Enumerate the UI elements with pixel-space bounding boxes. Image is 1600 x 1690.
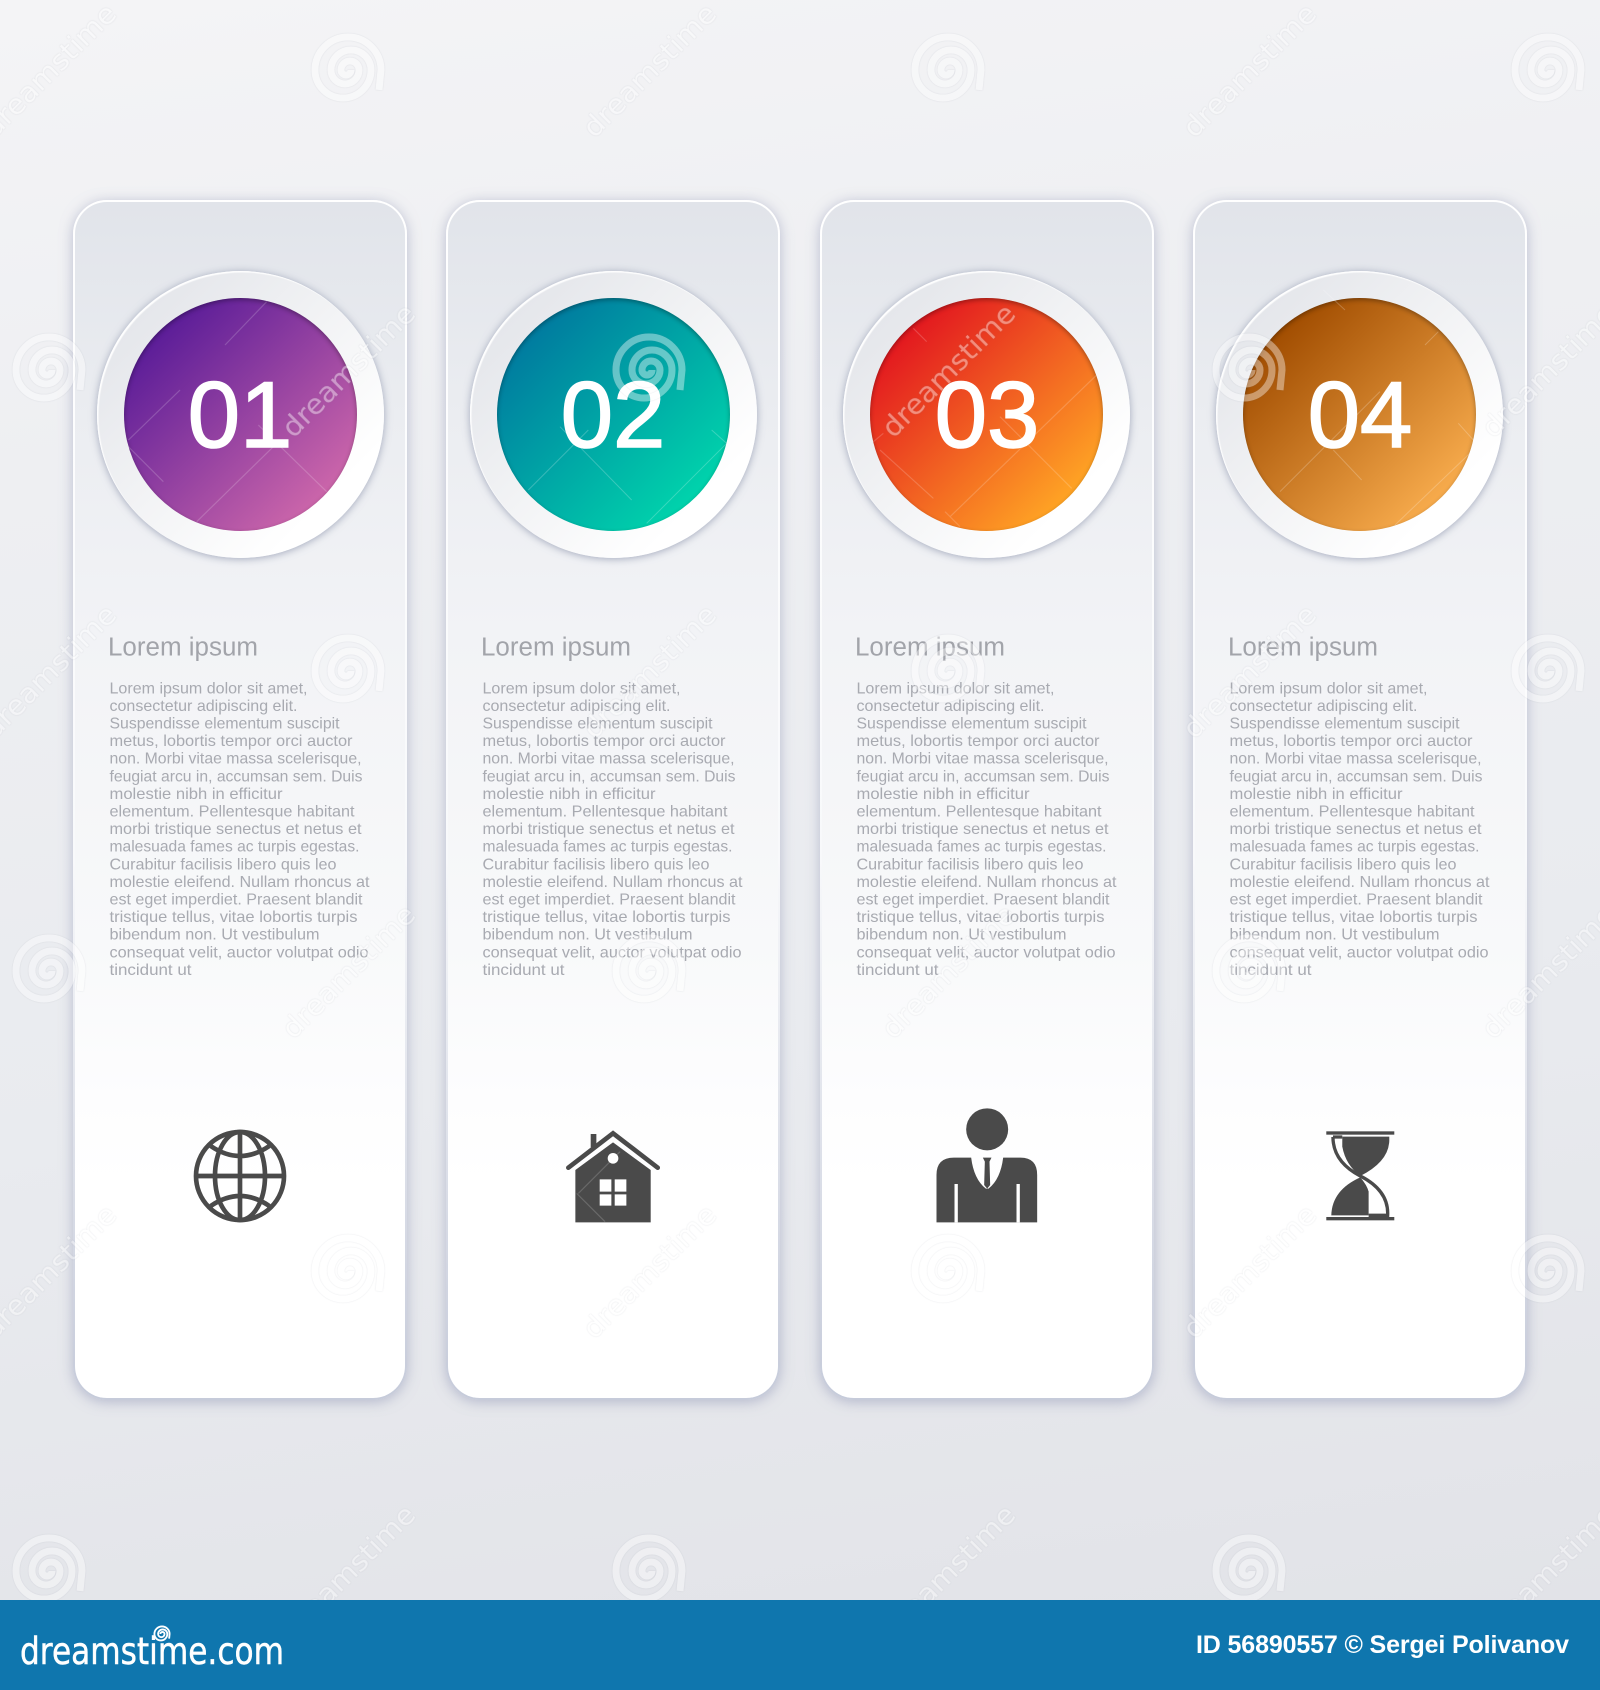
body text: morbi tristique senectus et netus et [856, 821, 1109, 838]
body text: Suspendisse elementum suscipit [856, 716, 1087, 732]
body text: metus, lobortis tempor orci auctor [110, 733, 353, 750]
footer bar [0, 1600, 1600, 1690]
body text: feugiat arcu in, accumsan sem. Duis [483, 768, 736, 785]
body text: molestie eleifend. Nullam rhoncus at [110, 874, 370, 891]
body text: consectetur adipiscing elit. [1229, 698, 1417, 715]
body text: Lorem ipsum dolor sit amet, [483, 680, 681, 697]
number 01: 01 [188, 362, 292, 467]
body text: Suspendisse elementum suscipit [483, 716, 713, 732]
panel: card 02 [446, 200, 780, 1400]
icon: house [569, 1133, 658, 1222]
body text: metus, lobortis tempor orci auctor [483, 733, 726, 750]
body text: malesuada fames ac turpis egestas. [856, 839, 1106, 856]
body text: tristique tellus, vitae lobortis turpis [483, 909, 731, 926]
body text: tristique tellus, vitae lobortis turpis [1229, 909, 1477, 926]
number 03: 03 [934, 362, 1039, 467]
body text: Curabitur facilisis libero quis leo [110, 856, 337, 873]
watermark text: dreamstime [275, 297, 422, 444]
body text: Lorem ipsum dolor sit amet, [856, 680, 1054, 697]
heading: Lorem ipsum [481, 634, 631, 662]
body text: bibendum non. Ut vestibulum [110, 927, 320, 944]
panel: card 01 [73, 200, 407, 1400]
footer content [20, 1626, 1569, 1673]
body text: est eget imperdiet. Praesent blandit [110, 892, 363, 908]
body text: Lorem ipsum dolor sit amet, [110, 680, 308, 697]
body text: est eget imperdiet. Praesent blandit [483, 892, 736, 908]
watermark text: dreamstime [275, 898, 422, 1045]
body text: non. Morbi vitae massa scelerisque, [110, 751, 362, 768]
image id and credit: ID 56890557 © Sergei Polivanov [1196, 1631, 1569, 1659]
watermark text: dreamstime [1176, 1198, 1323, 1345]
body text: non. Morbi vitae massa scelerisque, [483, 751, 735, 768]
body text: consequat velit, auctor volutpat odio [1229, 944, 1488, 961]
body text: non. Morbi vitae massa scelerisque, [1229, 751, 1481, 768]
body text: malesuada fames ac turpis egestas. [483, 839, 733, 856]
body text: Curabitur facilisis libero quis leo [856, 856, 1083, 873]
body text: tincidunt ut [483, 962, 565, 979]
body text: tincidunt ut [1229, 962, 1312, 979]
body text: molestie eleifend. Nullam rhoncus at [856, 874, 1117, 891]
body text: Curabitur facilisis libero quis leo [483, 856, 710, 873]
body text: Curabitur facilisis libero quis leo [1229, 856, 1456, 873]
card 04 content [1228, 362, 1490, 1220]
body text: bibendum non. Ut vestibulum [856, 927, 1066, 944]
body text: metus, lobortis tempor orci auctor [856, 733, 1100, 750]
body text: feugiat arcu in, accumsan sem. Duis [1229, 768, 1482, 785]
body text: morbi tristique senectus et netus et [110, 821, 362, 838]
panel: card 04 [1193, 200, 1527, 1400]
body text: consequat velit, auctor volutpat odio [110, 944, 369, 961]
watermark text: dreamstime [875, 898, 1022, 1045]
number badge ring [96, 270, 384, 558]
panel: card 03 [820, 200, 1154, 1400]
body text: est eget imperdiet. Praesent blandit [1229, 892, 1483, 908]
watermark hairlines [128, 290, 1473, 1222]
body text: Suspendisse elementum suscipit [1229, 716, 1460, 732]
body text: Lorem ipsum dolor sit amet, [1229, 680, 1427, 697]
watermark text: dreamstime [576, 1198, 723, 1345]
body text: tristique tellus, vitae lobortis turpis [856, 909, 1104, 926]
body text: molestie eleifend. Nullam rhoncus at [483, 874, 743, 891]
body text: metus, lobortis tempor orci auctor [1229, 733, 1473, 750]
card 01 content [108, 362, 370, 1222]
number badge ring [1216, 270, 1503, 558]
body text: molestie nibh in efficitur [483, 786, 656, 803]
icon: hourglass [1326, 1131, 1394, 1220]
body text: tincidunt ut [110, 962, 192, 979]
body text [483, 680, 743, 979]
heading: Lorem ipsum [854, 634, 1004, 662]
watermark text: dreamstime [1176, 598, 1323, 745]
body text: elementum. Pellentesque habitant [856, 804, 1102, 820]
body text: molestie nibh in efficitur [1229, 786, 1403, 803]
number badge ring [470, 270, 757, 558]
body text: molestie nibh in efficitur [856, 786, 1030, 803]
body text: bibendum non. Ut vestibulum [483, 927, 693, 944]
body text: non. Morbi vitae massa scelerisque, [856, 751, 1108, 768]
icon: businessman [936, 1108, 1037, 1222]
body text: morbi tristique senectus et netus et [1229, 821, 1482, 838]
body text: tincidunt ut [856, 962, 939, 979]
body text: elementum. Pellentesque habitant [1229, 804, 1475, 820]
body text [110, 680, 370, 979]
body text: bibendum non. Ut vestibulum [1229, 927, 1439, 944]
body text [1229, 680, 1490, 979]
body text: Suspendisse elementum suscipit [110, 716, 340, 732]
body text: feugiat arcu in, accumsan sem. Duis [110, 768, 362, 785]
body text: morbi tristique senectus et netus et [483, 821, 735, 838]
watermark text: dreamstime [576, 598, 723, 745]
body text: elementum. Pellentesque habitant [110, 804, 355, 820]
body text [856, 680, 1117, 979]
heading: Lorem ipsum [1228, 634, 1378, 662]
number 04: 04 [1307, 362, 1412, 467]
body text: malesuada fames ac turpis egestas. [110, 839, 360, 856]
body text: consequat velit, auctor volutpat odio [856, 944, 1115, 961]
body text: consectetur adipiscing elit. [110, 698, 298, 715]
body text: molestie nibh in efficitur [110, 786, 283, 803]
body text: elementum. Pellentesque habitant [483, 804, 728, 820]
card 02 content [481, 362, 743, 1222]
body text: tristique tellus, vitae lobortis turpis [110, 909, 358, 926]
card 03 content [854, 362, 1117, 1222]
heading: Lorem ipsum [108, 634, 258, 662]
body text: malesuada fames ac turpis egestas. [1229, 839, 1479, 856]
watermark text: dreamstime [875, 297, 1022, 444]
body text: consectetur adipiscing elit. [483, 698, 671, 715]
body text: consequat velit, auctor volutpat odio [483, 944, 742, 961]
body text: est eget imperdiet. Praesent blandit [856, 892, 1110, 908]
icon: globe [196, 1132, 284, 1220]
body text: consectetur adipiscing elit. [856, 698, 1044, 715]
watermark text: dreamstime [1176, 0, 1323, 144]
number badge ring [843, 270, 1130, 558]
number 02: 02 [561, 362, 666, 467]
body text: feugiat arcu in, accumsan sem. Duis [856, 768, 1109, 785]
watermark text: dreamstime [576, 0, 723, 144]
footer logo: dreamstime.com [20, 1630, 284, 1673]
body text: molestie eleifend. Nullam rhoncus at [1229, 874, 1490, 891]
